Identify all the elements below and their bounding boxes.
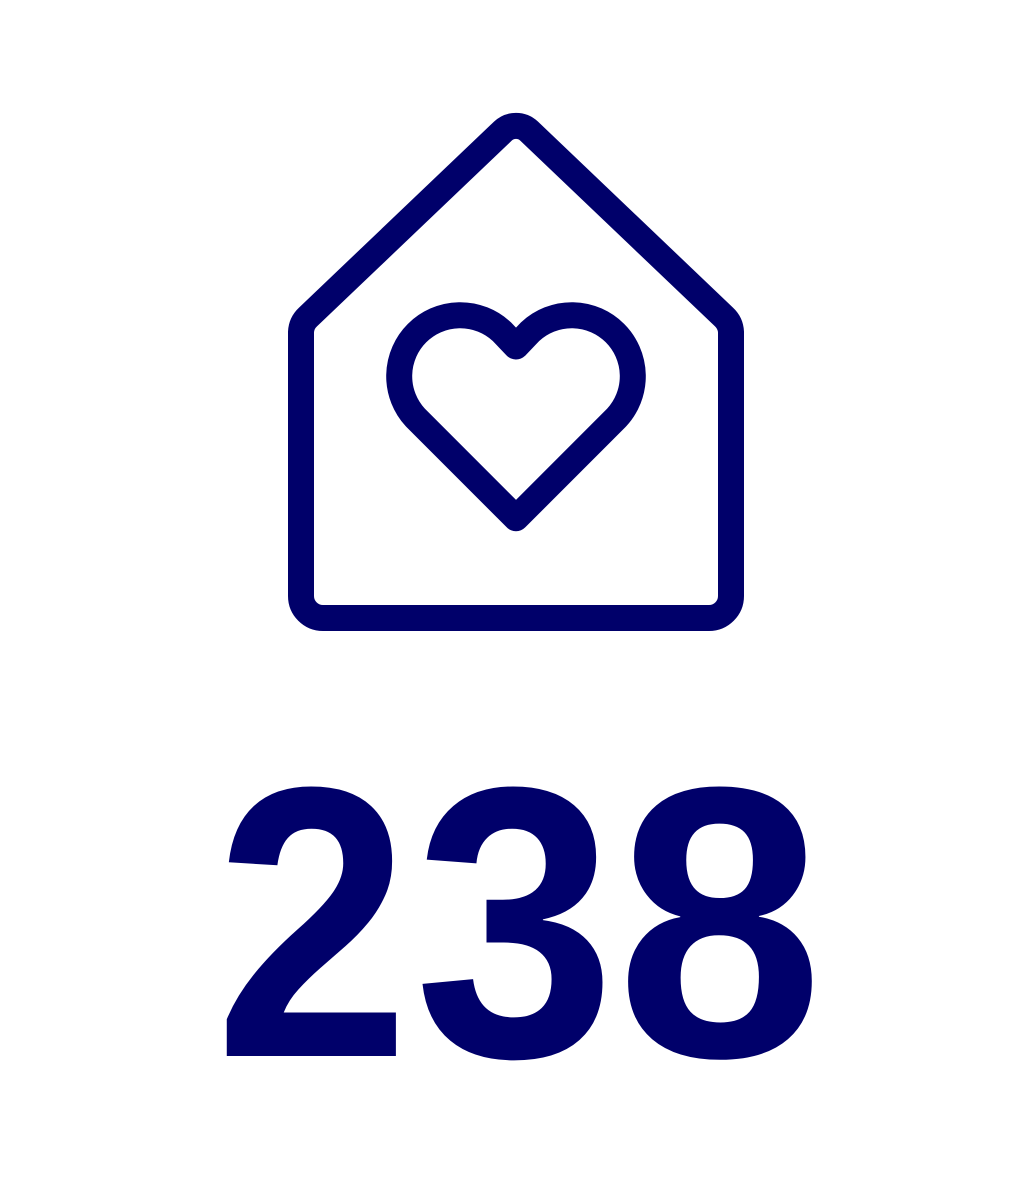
digit 8: 8	[616, 708, 823, 1138]
icon: heart	[399, 315, 633, 518]
digit 2: 2	[215, 708, 410, 1139]
statistic number	[215, 707, 823, 1139]
digit 3: 3	[414, 707, 616, 1139]
icon: house with heart	[301, 126, 731, 618]
icon: house outline	[301, 126, 731, 618]
